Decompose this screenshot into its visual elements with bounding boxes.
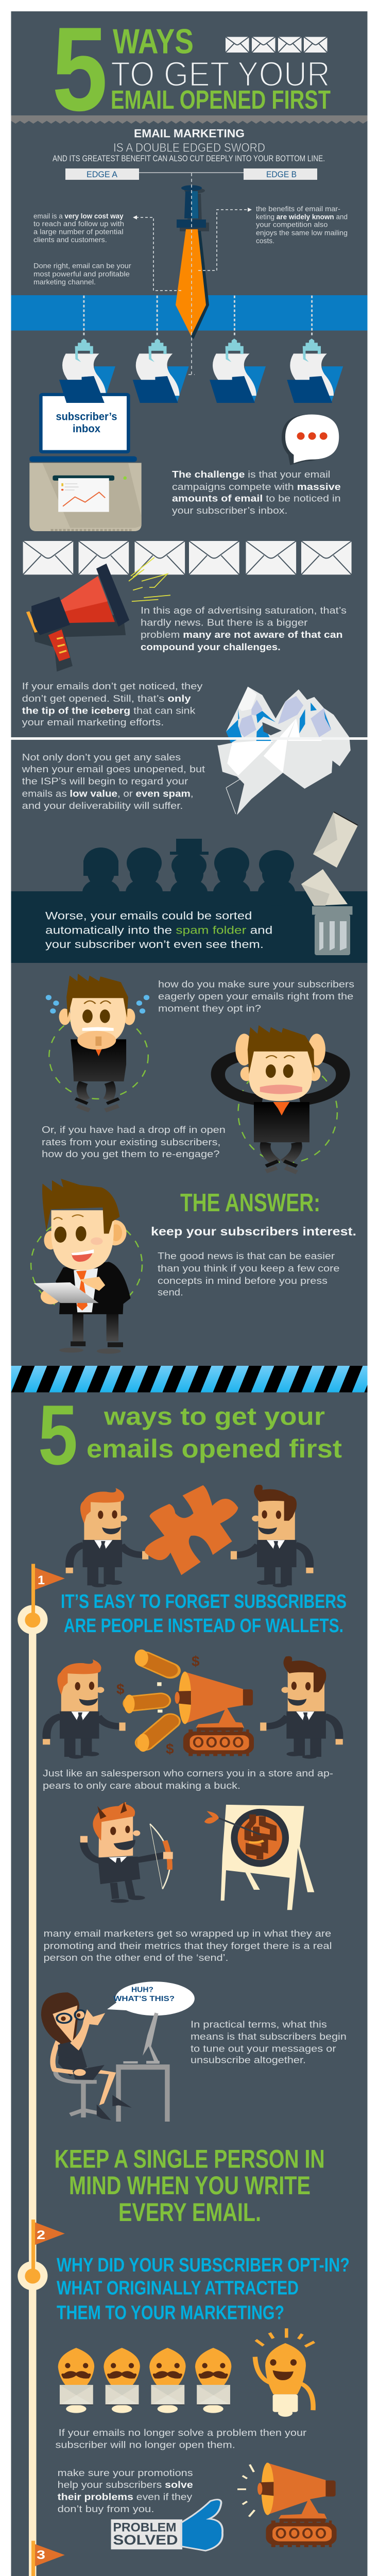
text: no longer solve a problem: If your emails no longer solve a problem then your <box>59 2428 306 2438</box>
heading: email marketing double edged sword: EMAIL MARKETING <box>134 127 245 140</box>
illustration: moustached light bulbs with envelopes <box>58 2348 231 2413</box>
text: tip of the iceberg <box>22 681 202 727</box>
icons: dollar signs: $ <box>166 1741 174 1757</box>
marker: flag 2 <box>18 2219 65 2291</box>
heading: 5 ways to get your emails opened first: 5 <box>38 1387 78 1482</box>
text: edge B drawbacks: enjoys the same low mailing <box>256 229 348 237</box>
heading: the answer: THE ANSWER: <box>180 1189 320 1217</box>
text: the challenge: campaigns compete with massive <box>172 482 341 492</box>
text: the good news: than you think if you keep a few core <box>158 1263 340 1274</box>
illustration: megaphone on tank <box>237 2463 337 2545</box>
heading: it's easy to forget <box>61 1591 347 1637</box>
icon: problem solved thumbs up <box>111 2500 222 2551</box>
timeline strip <box>29 1628 36 2576</box>
text: edge B drawbacks: your competition also <box>256 221 328 229</box>
edge labels: EDGE A <box>87 170 118 179</box>
icon: red megaphone <box>28 564 170 672</box>
text: tip of the iceberg: the tip of the iceberg that can sink <box>22 706 196 716</box>
text: edge B drawbacks: keting are widely known and <box>256 212 348 221</box>
text: edge A benefits: marketing channel. <box>33 278 96 286</box>
title <box>52 3 331 136</box>
text: how do you make sure: how do you make sure your subscribers <box>158 979 354 989</box>
text: advertising saturation: problem many are not aware of that can <box>141 630 343 640</box>
arrow: dashed center line <box>188 173 195 375</box>
subheading: keep your subscribers interest: keep your subscribers interest. <box>151 1225 356 1238</box>
text: how do you make sure: moment they opt in? <box>158 1004 261 1014</box>
label: subscriber's inbox: subscriber’s <box>56 411 117 422</box>
heading: why did your subscriber opt-in: WHAT ORIGINALLY ATTRACTED <box>57 2278 299 2299</box>
text: advertising saturation: hardly news. But there is a bigger <box>141 617 307 628</box>
icon: trash can <box>312 906 352 955</box>
illustration: target with arrow <box>204 1805 314 1910</box>
text: edge A benefits: to reach and follow up with <box>33 219 124 228</box>
text: the good news <box>158 1251 340 1297</box>
text: many email marketers <box>43 1928 332 1963</box>
text: the challenge: The challenge is that your email <box>172 469 331 480</box>
callout: huh what's this: WHAT’S THIS? <box>113 1994 175 2003</box>
text: edge B drawbacks: costs. <box>256 236 274 245</box>
text: spam folder: automatically into the spam folder and <box>45 924 272 937</box>
illustration: woman head <box>41 1992 105 2060</box>
text: low value or spam: and your deliverability will suffer. <box>22 801 183 811</box>
heading: 5 ways to get your emails opened first: emails opened first <box>87 1434 342 1463</box>
icon: megaphone sound lines <box>129 557 167 587</box>
illustration: men with money megaphone <box>43 1650 343 1759</box>
text: edge A benefits: clients and customers. <box>33 235 107 244</box>
heading: email marketing double edged sword: IS A DOUBLE EDGED SWORD <box>113 141 265 155</box>
text: advertising saturation: In this age of advertising saturation, that’s <box>141 605 347 616</box>
text: edge A benefits: a large number of potential <box>33 228 124 236</box>
icons: four folders with papers and claws <box>59 296 343 403</box>
heading: keep a single person in mind: MIND WHEN YOU WRITE <box>69 2171 311 2200</box>
callout: huh what's this: HUH? <box>131 1986 153 1994</box>
text: advertising saturation <box>141 605 347 652</box>
text: tip of the iceberg: If your emails don’t get noticed, they <box>22 681 202 691</box>
striped divider <box>11 1366 368 1392</box>
text: edge B drawbacks: the benefits of email mar- <box>256 205 340 213</box>
text: no longer solve a problem <box>56 2428 306 2450</box>
heading: why did your subscriber opt-in: THEM TO YOUR MARKETING? <box>57 2302 284 2324</box>
character: worried man biting nails <box>46 974 149 1110</box>
arrow: edge B connector <box>198 210 247 270</box>
label: subscriber's inbox <box>56 411 117 435</box>
text: drop off in open rates: Or, if you have had a drop off in open <box>42 1125 226 1135</box>
icon: falling envelopes <box>301 812 358 906</box>
text: many email marketers: person on the other end of the ‘send’. <box>43 1953 229 1963</box>
text: tip of the iceberg: don’t get opened. Still, that’s only <box>22 693 191 704</box>
text: drop off in open rates: rates from your existing subscribers, <box>42 1137 220 1147</box>
illustration: happy light bulb <box>255 2328 314 2417</box>
text: in practical terms: to tune out your messages or <box>191 2043 336 2054</box>
icons: dollar signs: $ <box>116 1681 125 1697</box>
label: subscriber's inbox: inbox <box>73 423 100 435</box>
callout: huh what's this <box>107 1981 195 2015</box>
heading: keep a single person in mind: EVERY EMAIL. <box>118 2198 261 2227</box>
text: low value or spam: Not only don’t you get any sales <box>22 752 181 762</box>
text: edge A benefits <box>33 212 131 286</box>
text: no longer solve a problem: subscriber will no longer open them. <box>56 2440 235 2450</box>
text: the good news: concepts in mind before you press <box>158 1276 328 1286</box>
character: happy man with tablet <box>31 1179 142 1354</box>
text: how do you make sure: eagerly open your emails right from the <box>158 991 353 1002</box>
title line TO GET YOUR: TO GET YOUR <box>111 55 330 94</box>
text: make sure your promotions: help your subscribers solve <box>58 2480 193 2490</box>
text: make sure your promotions <box>58 2468 193 2514</box>
text: edge B drawbacks <box>256 205 348 245</box>
text: how do you make sure <box>158 979 354 1014</box>
icons: dollar signs <box>116 1653 200 1757</box>
text: spam folder <box>45 910 272 951</box>
icon: iceberg <box>218 687 351 815</box>
text: in practical terms: means is that subscribers begin <box>191 2031 347 2042</box>
icon: laptop and printer <box>29 376 142 531</box>
text: the good news: The good news is that can be easier <box>158 1251 335 1261</box>
icons: row of envelopes <box>23 541 352 574</box>
text: salesperson: Just like an salesperson who corners you in a store and ap- <box>43 1768 333 1778</box>
marker: flag 3: 3 <box>37 2548 45 2562</box>
icon: problem solved thumbs up: PROBLEM <box>113 2520 176 2535</box>
text: drop off in open rates: how do you get them to re-engage? <box>42 1149 219 1159</box>
text: low value or spam <box>21 752 205 811</box>
heading: email marketing double edged sword: AND ITS GREATEST BENEFIT CAN ALSO CUT DEEPLY INTO YOUR BOTTOM LINE. <box>53 154 325 163</box>
text: the challenge: your subscriber’s inbox. <box>172 505 287 516</box>
title word WAYS: WAYS <box>113 22 194 61</box>
icon: sword <box>176 185 209 339</box>
arrowheads <box>133 208 252 219</box>
illustration: two men with puzzle piece <box>66 1485 313 1587</box>
text: drop off in open rates <box>42 1125 226 1159</box>
big number 5: 5 <box>52 3 108 136</box>
text: make sure your promotions: don’t buy from you. <box>58 2504 154 2514</box>
text: make sure your promotions: their problems even if they <box>58 2492 192 2502</box>
icons: silhouettes of subscribers <box>82 839 295 906</box>
text: edge A benefits: most powerful and profitable <box>33 269 130 278</box>
text: low value or spam: the ISP’s will begin to regard your <box>22 776 188 786</box>
text: edge A benefits: Done right, email can be your <box>33 262 131 270</box>
text: make sure your promotions: make sure your promotions <box>58 2468 193 2478</box>
character: panicked man holding head <box>218 1025 343 1172</box>
heading: why did your subscriber opt-in <box>57 2255 350 2324</box>
water line <box>11 737 368 740</box>
text: in practical terms: unsubscribe altogether. <box>191 2055 306 2065</box>
marker: flag 1 <box>18 1564 65 1634</box>
text: the challenge: amounts of email to be noticed in <box>172 494 341 504</box>
icons: dollar signs: $ <box>192 1653 200 1669</box>
blue band <box>11 295 368 331</box>
text: spam folder: Worse, your emails could be sorted <box>45 910 252 922</box>
text: salesperson <box>43 1768 333 1791</box>
heading: email marketing double edged sword <box>53 127 325 163</box>
icon: speech bubble <box>282 415 339 465</box>
text: tip of the iceberg: your email marketing efforts. <box>22 717 164 727</box>
icons: four envelopes <box>226 37 328 53</box>
marker: flag 1: 1 <box>38 1573 45 1587</box>
heading: 5 ways to get your emails opened first: ways to get your <box>104 1403 325 1430</box>
illustration: woman with glasses at desk <box>53 2012 170 2122</box>
icon: problem solved thumbs up: SOLVED <box>113 2532 178 2548</box>
text: advertising saturation: compound your challenges. <box>141 642 281 652</box>
text: the good news: send. <box>158 1287 183 1297</box>
text: many email marketers: promoting and their metrics that they forget there is a real <box>43 1941 332 1951</box>
heading: keep a single person in mind <box>55 2144 325 2227</box>
edge labels: EDGE B <box>266 170 297 179</box>
text: in practical terms <box>191 2020 347 2065</box>
text: low value or spam: emails as low value , or even spam , <box>22 788 194 799</box>
text: the challenge <box>172 469 341 516</box>
arrow: edge A connector <box>135 217 181 291</box>
text: salesperson: pears to only care about making a buck. <box>43 1781 240 1791</box>
text: in practical terms: In practical terms, what this <box>191 2020 327 2030</box>
text: spam folder: your subscriber won’t even see them. <box>45 939 264 951</box>
illustration: devil man with bow <box>80 1802 173 1903</box>
text: low value or spam: when your email goes unopened, but <box>21 764 205 774</box>
text: edge A benefits: email is a very low cost way <box>33 212 124 220</box>
edge labels <box>65 168 317 180</box>
heading: 5 ways to get your emails opened first <box>38 1387 342 1482</box>
marker: flag 3 <box>18 2541 65 2576</box>
panel: dark spam band <box>11 891 368 963</box>
text: many email marketers: many email marketers get so wrapped up in what they are <box>43 1928 331 1939</box>
marker: flag 2: 2 <box>37 2228 45 2242</box>
